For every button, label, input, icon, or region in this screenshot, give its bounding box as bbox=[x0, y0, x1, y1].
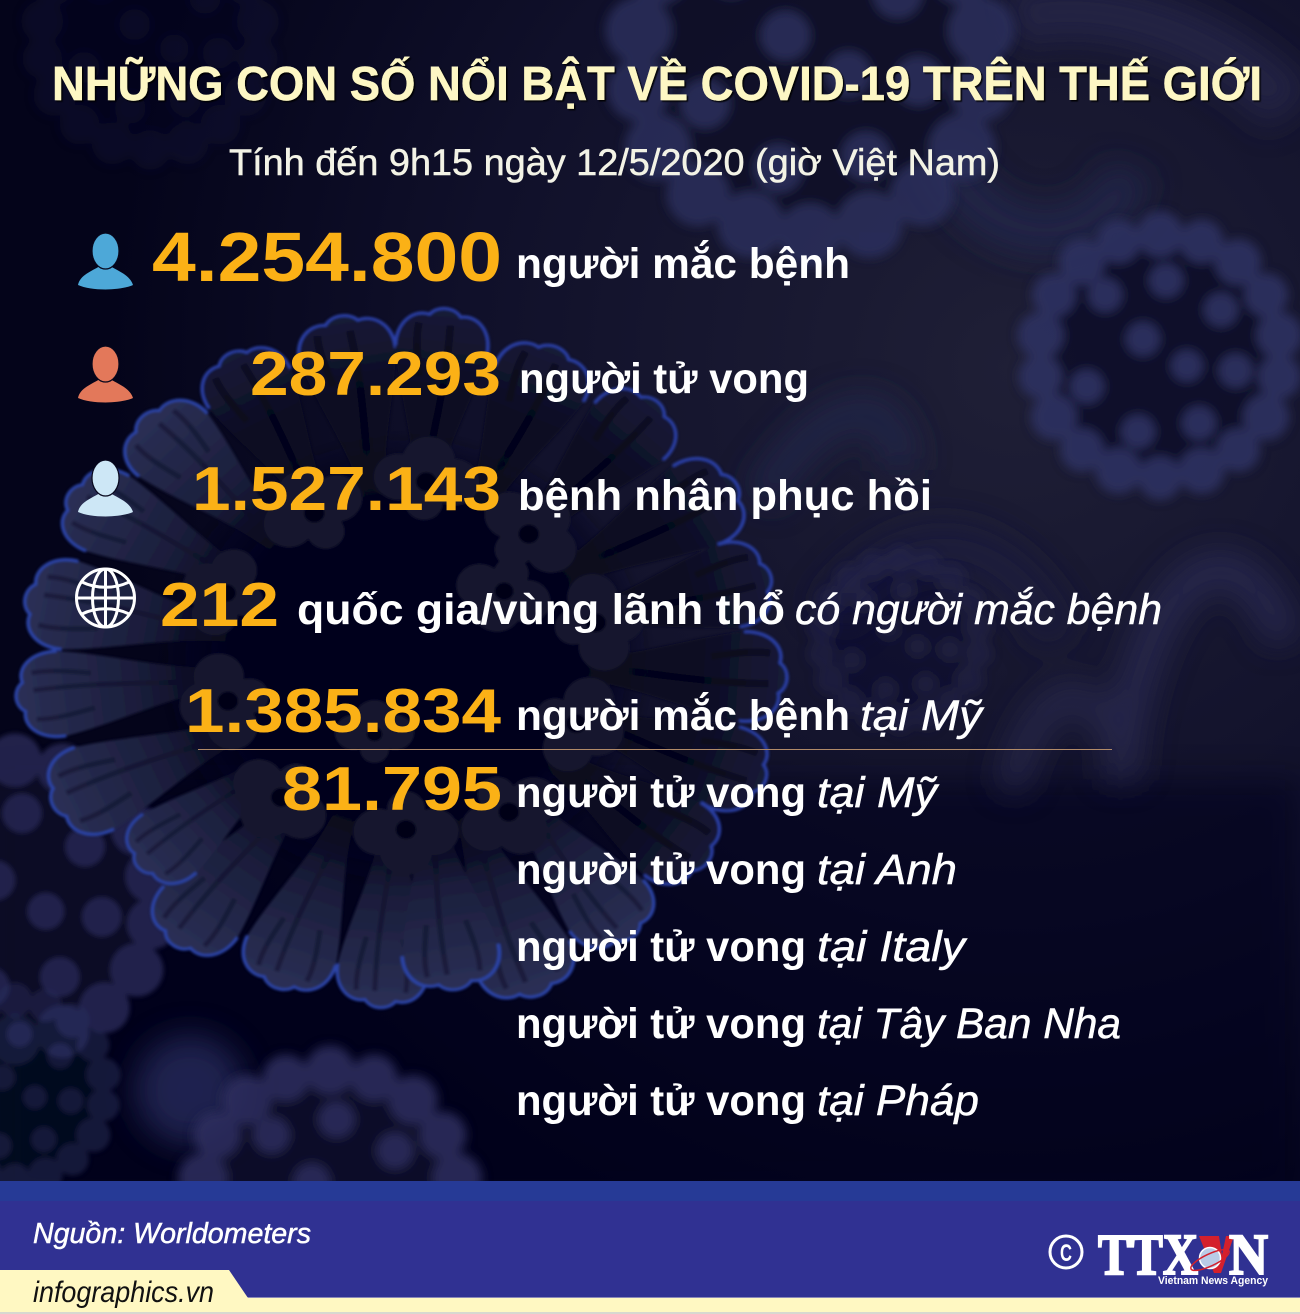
stat: total cases: 4.254.800 bbox=[152, 218, 502, 296]
text: deaths UK bbox=[516, 846, 957, 894]
text: deaths UK: tại Anh bbox=[817, 846, 957, 894]
icon: copyright: C bbox=[1060, 1240, 1072, 1267]
subtitle: Tính đến 9h15 ngày 12/5/2020 (giờ Việt Nam) bbox=[229, 142, 1000, 183]
text: deaths France bbox=[516, 1077, 979, 1125]
stat: US cases: 1.385.834 bbox=[185, 677, 502, 746]
stat: recovered: 1.527.143 bbox=[192, 455, 501, 524]
text: deaths Spain bbox=[516, 1000, 1121, 1048]
logo: TTXVN bbox=[1098, 1222, 1269, 1287]
stat: US deaths: người tử vong bbox=[516, 769, 806, 817]
stat: deaths: 287.293 bbox=[250, 340, 501, 409]
stat: countries: quốc gia/vùng lãnh thổ bbox=[297, 586, 785, 634]
text: deaths Italy: tại Italy bbox=[817, 923, 968, 971]
logo: TTXVN: TTX bbox=[1098, 1222, 1198, 1287]
stat: US deaths: 81.795 bbox=[282, 755, 502, 824]
stat: US deaths bbox=[282, 755, 940, 824]
website tab: infographics.vn bbox=[33, 1276, 214, 1309]
stat: recovered bbox=[192, 455, 932, 524]
icon: person orange bbox=[78, 346, 133, 402]
stat: countries bbox=[160, 571, 1162, 640]
text: deaths UK: người tử vong bbox=[516, 846, 806, 894]
text: deaths France: tại Pháp bbox=[817, 1077, 979, 1125]
icon: person blue bbox=[78, 233, 133, 290]
logo: TTXVN: N bbox=[1229, 1222, 1268, 1287]
stat: countries: 212 bbox=[160, 571, 279, 640]
illustration: large virus bbox=[11, 304, 790, 1012]
text: deaths Italy: người tử vong bbox=[516, 923, 806, 971]
stat: deaths: người tử vong bbox=[519, 355, 809, 403]
stat: US cases: người mắc bệnh bbox=[516, 691, 850, 740]
stat: total cases bbox=[152, 218, 850, 296]
stat: US cases: tại Mỹ bbox=[860, 692, 985, 740]
title: NHỮNG CON SỐ NỔI BẬT VỀ COVID-19 TRÊN THẾ GIỚI bbox=[52, 56, 1262, 111]
stat: total cases: người mắc bệnh bbox=[516, 239, 850, 288]
stat: US deaths: tại Mỹ bbox=[817, 769, 940, 817]
stat: countries: có người mắc bệnh bbox=[795, 586, 1162, 634]
text: deaths France: người tử vong bbox=[516, 1077, 806, 1125]
text: deaths Italy bbox=[516, 923, 968, 971]
icon: globe bbox=[76, 569, 134, 627]
stat: deaths bbox=[250, 340, 809, 409]
footer band bbox=[0, 1181, 1300, 1314]
text: deaths Spain: người tử vong bbox=[516, 1000, 806, 1048]
stat: recovered: bệnh nhân phục hồi bbox=[518, 472, 932, 520]
website tab bbox=[0, 1270, 248, 1312]
text: deaths Spain: tại Tây Ban Nha bbox=[817, 1000, 1121, 1048]
icon: person light blue bbox=[78, 460, 133, 516]
icon: copyright bbox=[1050, 1236, 1082, 1268]
source text: Nguồn: Worldometers bbox=[33, 1218, 311, 1250]
stat: US cases bbox=[185, 677, 985, 746]
logo: TTXVN: Vietnam News Agency bbox=[1158, 1275, 1269, 1287]
